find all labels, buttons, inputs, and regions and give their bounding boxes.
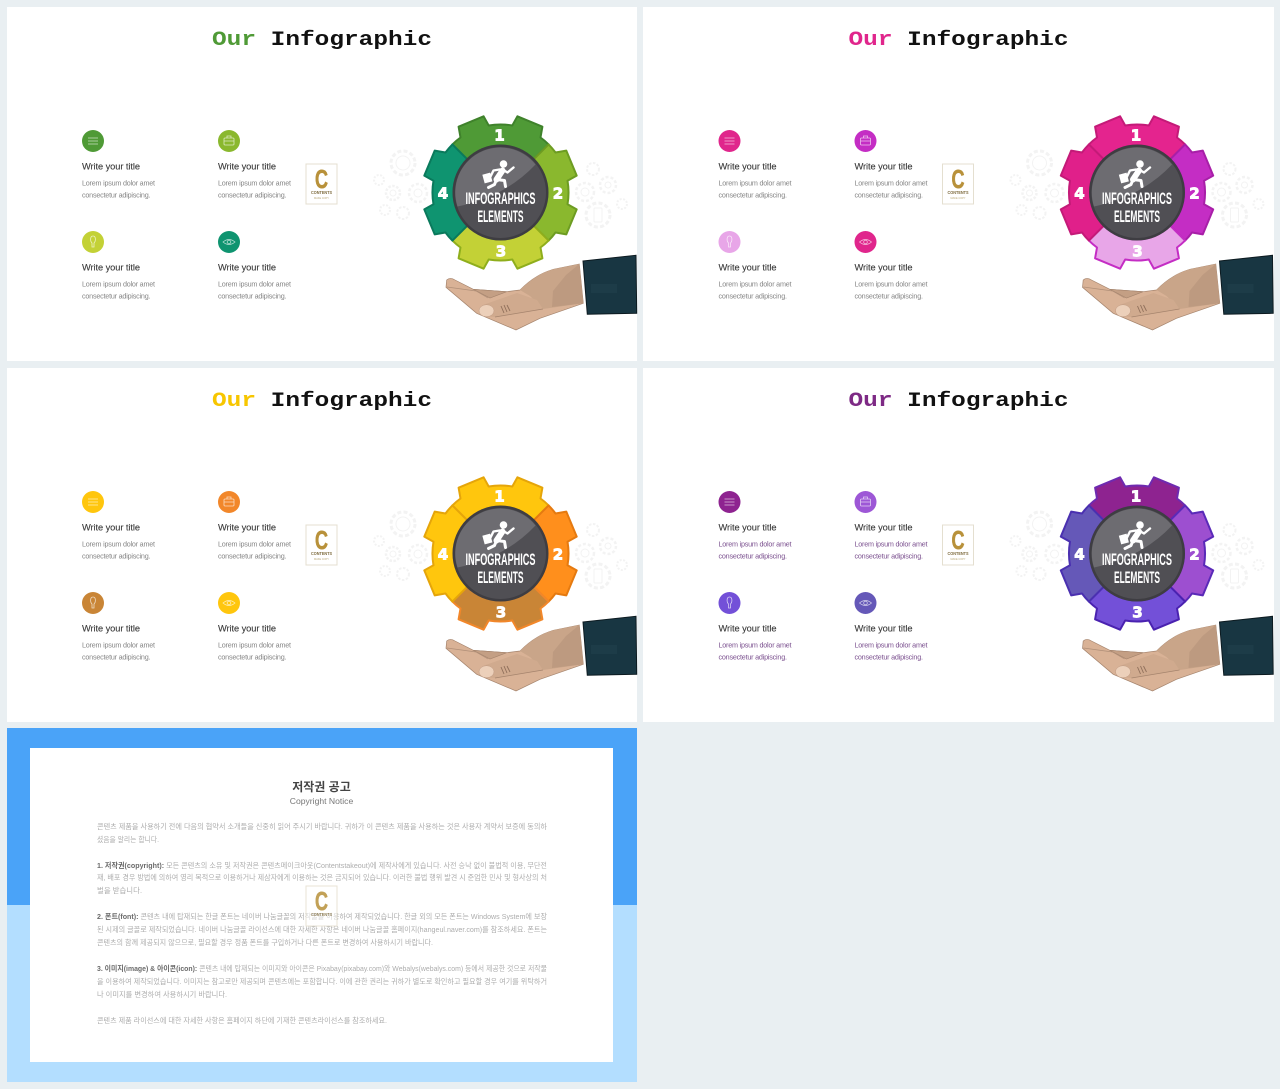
section 1: 벌을 받습니다. <box>97 885 142 895</box>
item 3: consectetur adipiscing. <box>82 292 150 300</box>
logo watermark: C <box>952 164 965 194</box>
gear diagram <box>424 477 577 630</box>
hand and sleeve <box>446 255 637 330</box>
logo watermark: MAKE COPY <box>314 557 329 561</box>
title: Our Infographic <box>848 390 1068 413</box>
title: Our Infographic <box>848 29 1068 52</box>
item 2: consectetur adipiscing. <box>218 190 286 200</box>
background gear icons <box>1010 151 1264 227</box>
item 1: Lorem ipsum dolor amet <box>718 178 792 188</box>
item 4 <box>218 592 291 662</box>
item 3: Write your title <box>718 624 776 634</box>
item 4: consectetur adipiscing. <box>854 292 923 300</box>
logo watermark <box>942 164 974 204</box>
logo watermark: CONTENTS <box>948 551 968 556</box>
item 2: consectetur adipiscing. <box>218 552 286 560</box>
gear diagram: 3 <box>1132 604 1143 622</box>
item 3: Lorem ipsum dolor amet <box>718 280 792 288</box>
item 2 <box>854 130 928 200</box>
item 2: consectetur adipiscing. <box>854 552 923 560</box>
item 2: Lorem ipsum dolor amet <box>218 178 291 188</box>
gear diagram: INFOGRAPHICS <box>466 551 536 569</box>
background gear icons <box>1010 512 1264 588</box>
item 1: consectetur adipiscing. <box>718 190 787 200</box>
logo watermark: CONTENTS <box>311 912 332 917</box>
item 4: Lorem ipsum dolor amet <box>218 280 291 288</box>
item 1: Lorem ipsum dolor amet <box>82 540 155 548</box>
gear diagram: 1 <box>494 126 505 144</box>
logo watermark <box>942 525 974 565</box>
logo watermark: C <box>315 525 328 555</box>
item 3: Lorem ipsum dolor amet <box>718 640 792 650</box>
item 3: Lorem ipsum dolor amet <box>82 640 155 650</box>
item 3: Write your title <box>82 262 140 272</box>
background gear icons <box>374 151 627 227</box>
item 4: Write your title <box>854 262 912 272</box>
item 2 <box>218 491 291 560</box>
item 2: consectetur adipiscing. <box>854 190 923 200</box>
section 1: 1. 저작권(copyright): 모든 콘텐츠의 소유 및 저작권은 콘텐츠메이크아웃(Contentstakeout)에 제작사에게 있습니다. 사전 승낙 없이 불법적 이용, 무단전 <box>97 860 547 870</box>
item 1: Write your title <box>82 522 140 532</box>
gear diagram: 1 <box>1131 488 1141 506</box>
item 4: consectetur adipiscing. <box>218 292 286 300</box>
gear diagram <box>1061 116 1213 269</box>
item 1: Write your title <box>718 162 776 172</box>
item 2: Write your title <box>854 522 912 532</box>
section 2: 콘텐츠의 함께 제공되지 않으므로, 필요할 경우 정품 폰트를 구입하거나 다른 폰트로 변경하여 사용하시기 바랍니다. <box>97 937 433 947</box>
item 4 <box>854 592 928 662</box>
item 1: Write your title <box>718 522 776 532</box>
gear diagram: INFOGRAPHICS <box>1102 551 1172 569</box>
item 4 <box>854 231 928 300</box>
item 2: Write your title <box>218 162 276 172</box>
gear diagram: 1 <box>494 488 505 506</box>
gear diagram: 1 <box>1131 126 1141 144</box>
item 1 <box>82 130 155 200</box>
background gear icons <box>374 512 627 588</box>
item 1 <box>718 130 792 200</box>
section 1: 재, 배포 경우 방법에 의하여 영리 목적으로 이용하거나 제삼자에게 이용하는 것은 금지되어 있습니다. 이러한 불법 행위 발견 시 준엄한 민사 및 형사상의 처 <box>97 872 547 882</box>
section 2: 된 시제의 글꼴로 제작되었습니다. 네이버 나눔글꼴 라이선스에 대한 자세한 사항은 네이버 나눔글꼴 홈페이지(hangeul.naver.com)를 참조하세요. 폰트는 <box>97 924 547 934</box>
item 3: consectetur adipiscing. <box>718 652 787 662</box>
item 1: consectetur adipiscing. <box>82 190 150 200</box>
hand and sleeve <box>1082 255 1273 330</box>
item 2 <box>854 491 928 560</box>
item 4: consectetur adipiscing. <box>854 652 923 662</box>
gear diagram: 3 <box>496 604 506 622</box>
gear diagram: 2 <box>1189 546 1200 564</box>
item 2: Lorem ipsum dolor amet <box>218 540 291 548</box>
gear diagram: INFOGRAPHICS <box>1102 190 1172 208</box>
item 4: Write your title <box>854 624 912 634</box>
panel: yellow infographic <box>7 368 637 722</box>
gear diagram: 4 <box>438 184 448 202</box>
item 3 <box>82 231 155 300</box>
logo watermark: CONTENTS <box>311 551 332 556</box>
gear diagram: ELEMENTS <box>478 569 524 587</box>
gear diagram <box>1061 477 1213 630</box>
gear diagram: ELEMENTS <box>478 208 524 226</box>
panel: purple infographic <box>643 368 1274 722</box>
item 3 <box>718 592 792 662</box>
item 1 <box>82 491 155 560</box>
logo watermark: C <box>315 164 328 194</box>
panel: pink infographic <box>643 7 1274 361</box>
section 3: 3. 이미지(image) & 아이콘(icon): 콘텐츠 내에 탑재되는 이미지와 아이콘은 Pixabay(pixabay.com)와 Webalys(webalys.com) 등에서 제공한 것으로 저작물 <box>97 963 547 973</box>
item 1: consectetur adipiscing. <box>718 552 787 560</box>
logo watermark: CONTENTS <box>311 190 332 195</box>
item 2: Lorem ipsum dolor amet <box>854 540 928 548</box>
item 1: Lorem ipsum dolor amet <box>82 178 155 188</box>
logo watermark <box>306 525 337 565</box>
item 2: Write your title <box>854 162 912 172</box>
title: Our Infographic <box>212 390 432 413</box>
section 3: 을 이용하여 제작되었습니다. 이미지는 참고로만 제공되며 콘텐츠에는 포함합니다. 이에 관한 권리는 귀하가 별도로 확인하고 필요할 경우 여기를 위탁하거 <box>97 976 547 986</box>
hand and sleeve <box>1082 616 1273 691</box>
logo watermark: MAKE COPY <box>950 557 966 561</box>
copyright subheading: Copyright Notice <box>290 796 353 806</box>
gear diagram: 2 <box>553 546 563 564</box>
title: Our Infographic <box>212 29 432 52</box>
section 1 <box>97 860 547 895</box>
hand and sleeve <box>446 616 637 691</box>
section 2: 2. 폰트(font): 콘텐츠 내에 탑재되는 한글 폰트는 네이버 나눔글꼴의 저작물을 이용하여 제작되었습니다. 한글 외의 모든 폰트는 Windows System에 보장 <box>97 911 547 921</box>
item 1: consectetur adipiscing. <box>82 552 150 560</box>
item 4: consectetur adipiscing. <box>218 652 286 662</box>
item 3: consectetur adipiscing. <box>718 292 787 300</box>
logo watermark: C <box>315 886 328 916</box>
item 3: Write your title <box>718 262 776 272</box>
item 3: Lorem ipsum dolor amet <box>82 280 155 288</box>
item 3 <box>82 592 155 662</box>
item 2: Lorem ipsum dolor amet <box>854 178 928 188</box>
item 1: Lorem ipsum dolor amet <box>718 540 792 548</box>
logo watermark <box>306 886 337 926</box>
item 4: Lorem ipsum dolor amet <box>854 280 928 288</box>
intro paragraph <box>97 821 547 844</box>
intro paragraph: 셨음을 알리는 합니다. <box>97 834 159 844</box>
gear diagram <box>424 116 577 269</box>
gear diagram: 2 <box>553 184 563 202</box>
item 4 <box>218 231 291 300</box>
intro paragraph: 콘텐츠 제품을 사용하기 전에 다음의 협약서 소개들을 신중히 읽어 주시기 바랍니다. 귀하가 이 콘텐츠 제품을 사용하는 것은 사용자 계약서 보증에 동의하 <box>97 821 547 831</box>
closing note: 콘텐츠 제품 라이선스에 대한 자세한 사항은 홈페이지 하단에 기재한 콘텐츠라이선스를 참조하세요. <box>97 1015 387 1025</box>
panel: copyright notice <box>7 728 637 1082</box>
gear diagram: 2 <box>1189 184 1200 202</box>
logo watermark: CONTENTS <box>948 190 968 195</box>
item 1 <box>718 491 792 560</box>
item 4: Write your title <box>218 262 276 272</box>
gear diagram: ELEMENTS <box>1114 208 1160 226</box>
gear diagram: 4 <box>1074 546 1085 564</box>
gear diagram: ELEMENTS <box>1114 569 1160 587</box>
item 3 <box>718 231 792 300</box>
item 1: Write your title <box>82 162 140 172</box>
section 3 <box>97 963 547 999</box>
section 2 <box>97 911 547 947</box>
logo watermark <box>306 164 337 204</box>
gear diagram: 4 <box>1074 184 1085 202</box>
gear diagram: 3 <box>1132 242 1143 260</box>
section 3: 나 이미지를 변경하여 사용하시기 바랍니다. <box>97 989 227 999</box>
panel: green infographic <box>7 7 637 361</box>
item 4: Lorem ipsum dolor amet <box>854 640 928 650</box>
gear diagram: 4 <box>438 546 448 564</box>
item 2 <box>218 130 291 200</box>
logo watermark: C <box>952 525 965 555</box>
item 3: consectetur adipiscing. <box>82 652 150 662</box>
item 4: Write your title <box>218 624 276 634</box>
item 4: Lorem ipsum dolor amet <box>218 640 291 650</box>
logo watermark: MAKE COPY <box>950 196 966 200</box>
gear diagram: 3 <box>496 242 506 260</box>
logo watermark: MAKE COPY <box>314 196 329 200</box>
item 2: Write your title <box>218 522 276 532</box>
item 3: Write your title <box>82 624 140 634</box>
copyright heading: 저작권 공고 <box>292 779 351 794</box>
gear diagram: INFOGRAPHICS <box>466 190 536 208</box>
